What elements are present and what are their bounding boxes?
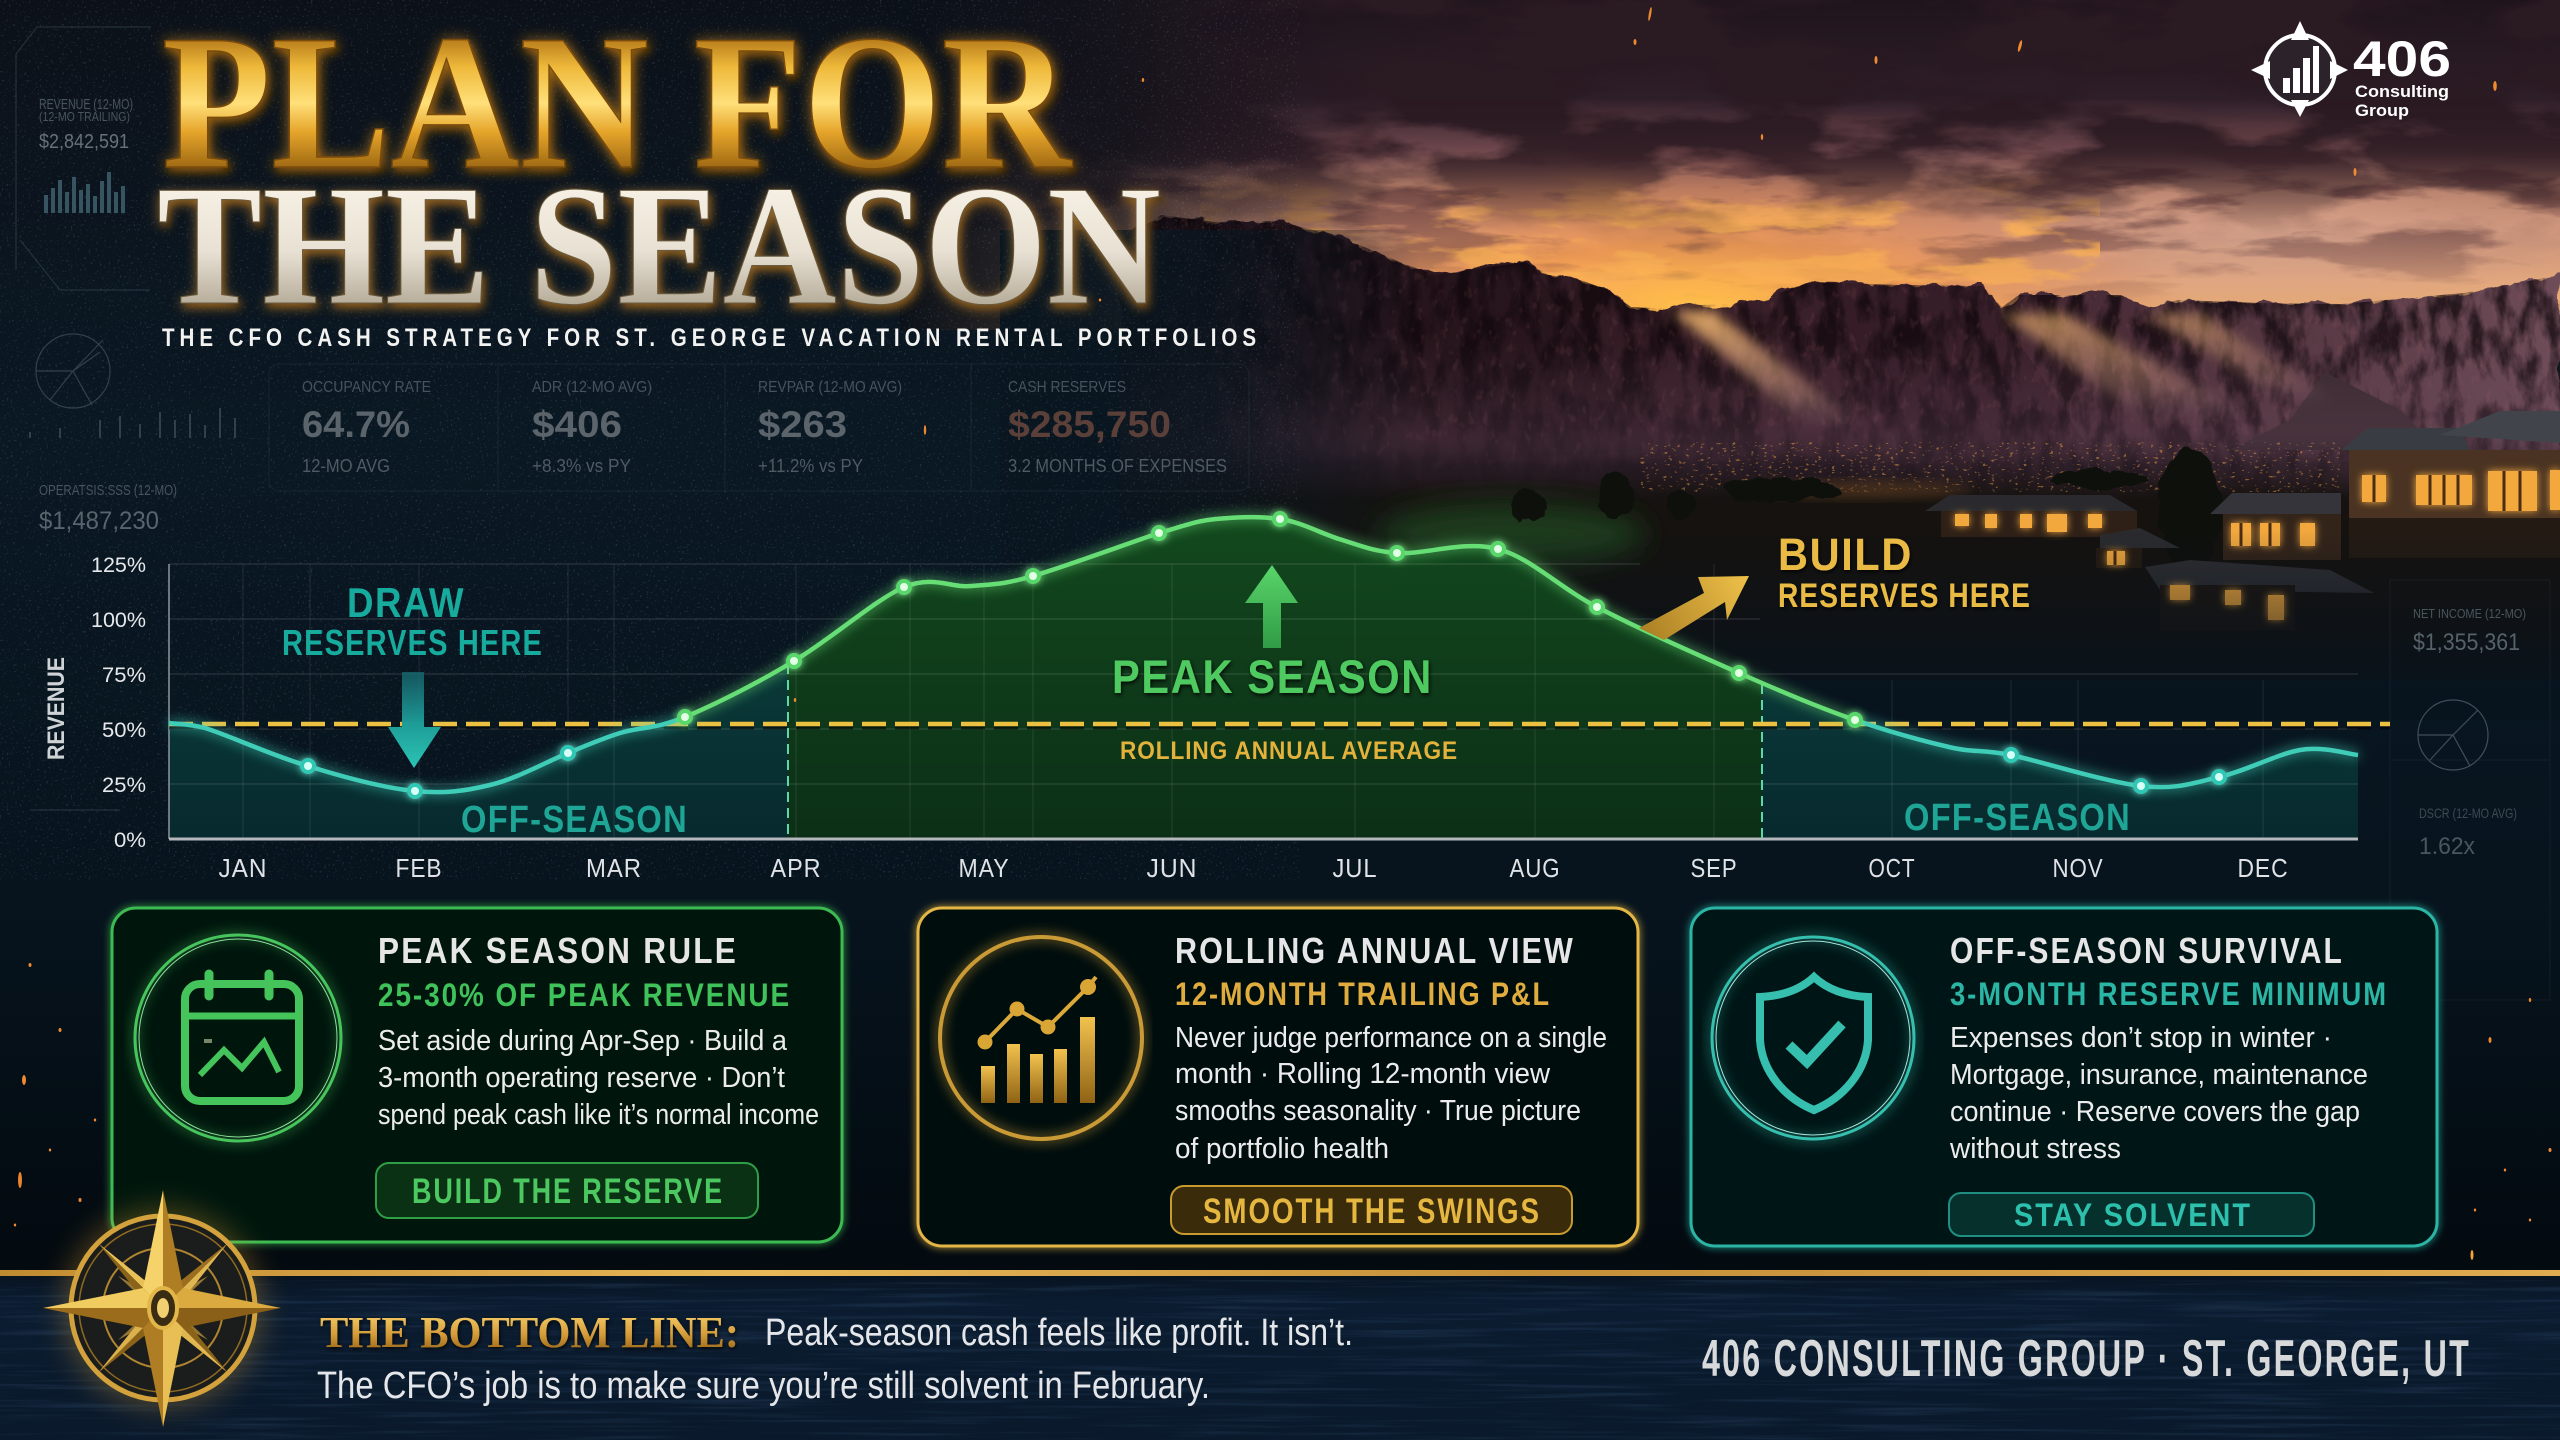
month labels: AUG xyxy=(1510,853,1560,883)
draw reserves callout xyxy=(282,579,543,663)
KPI occupancy xyxy=(302,379,431,476)
icon: calendar with chart xyxy=(135,935,341,1141)
icon: shield with check xyxy=(1712,937,1914,1139)
y axis labels: 0% xyxy=(114,829,146,852)
y axis labels: 25% xyxy=(102,774,146,797)
logo wordmark: Consulting xyxy=(2355,82,2449,101)
card body: Mortgage, insurance, maintenance xyxy=(1950,1059,2368,1091)
ghost net income: $1,355,361 xyxy=(2413,629,2520,656)
card body: 3-month operating reserve · Don’t xyxy=(378,1062,785,1094)
logo xyxy=(2251,21,2451,120)
month labels: FEB xyxy=(396,853,442,883)
fades into dark dashboard xyxy=(1000,230,2560,750)
off-season fill left xyxy=(170,668,788,838)
logo wordmark: Group xyxy=(2355,101,2409,120)
arrow: draw down xyxy=(388,672,441,768)
KPI cash reserves: CASH RESERVES xyxy=(1008,379,1126,396)
card: off-season survival xyxy=(1691,908,2437,1246)
ghost net income xyxy=(2413,606,2526,656)
y axis labels: 100% xyxy=(91,609,146,632)
month labels: JUL xyxy=(1332,853,1378,883)
KPI RevPAR: $263 xyxy=(758,404,847,445)
card body: of portfolio health xyxy=(1175,1133,1389,1165)
revenue curve, off-season start xyxy=(169,717,685,792)
card: rolling annual view xyxy=(918,908,1638,1246)
icon: bars with trend line xyxy=(940,937,1142,1139)
ghost revenue metric: (12-MO TRAILING) xyxy=(39,109,130,124)
card subheading: 3-MONTH RESERVE MINIMUM xyxy=(1950,976,2388,1012)
revenue curve, peak xyxy=(685,517,1855,720)
trees xyxy=(1512,450,2222,570)
faint dashboard grain xyxy=(0,0,1300,880)
card: peak season rule xyxy=(112,908,842,1242)
KPI cash reserves: $285,750 xyxy=(1008,404,1171,445)
KPI cash reserves xyxy=(1008,379,1227,476)
card subheading: 25-30% OF PEAK REVENUE xyxy=(378,977,791,1013)
card heading: OFF-SEASON SURVIVAL xyxy=(1950,930,2344,971)
KPI occupancy: OCCUPANCY RATE xyxy=(302,379,431,396)
card body xyxy=(1175,1022,1607,1165)
month labels: APR xyxy=(770,853,822,883)
card body xyxy=(1949,1022,2368,1165)
ghost DSCR: 1.62x xyxy=(2419,833,2475,860)
KPI cash reserves: 3.2 MONTHS OF EXPENSES xyxy=(1008,456,1227,476)
green data points xyxy=(677,511,1863,728)
bottom line statement: THE BOTTOM LINE: xyxy=(320,1308,739,1357)
card body: spend peak cash like it’s normal income xyxy=(378,1099,819,1131)
card body: without stress xyxy=(1949,1133,2121,1165)
ghost dashboard: right column xyxy=(2390,580,2550,1000)
ghost revenue metric xyxy=(39,96,133,153)
card body: Never judge performance on a single xyxy=(1175,1022,1607,1054)
draw reserves callout: DRAW xyxy=(347,579,465,626)
background scene: sunset sky over mountains xyxy=(930,0,2560,658)
card body: Expenses don’t stop in winter · xyxy=(1950,1022,2332,1054)
revenue curve, off-season end xyxy=(1855,720,2358,787)
x axis xyxy=(169,838,2358,840)
build reserves callout xyxy=(1778,529,2031,615)
ghost sparkline bars xyxy=(30,408,235,438)
title xyxy=(157,0,1161,341)
button: smooth the swings xyxy=(1171,1186,1572,1234)
ghost KPI strip xyxy=(269,364,1249,491)
month labels xyxy=(218,853,2288,883)
y axis labels xyxy=(91,554,146,852)
subtitle: THE CFO CASH STRATEGY FOR ST. GEORGE VACATION RENTAL PORTFOLIOS xyxy=(162,324,1261,352)
KPI RevPAR: REVPAR (12-MO AVG) xyxy=(758,379,902,396)
KPI ADR: ADR (12-MO AVG) xyxy=(532,379,652,396)
teal data points xyxy=(300,745,2227,799)
logo wordmark: 406 xyxy=(2353,31,2451,87)
button: build the reserve: BUILD THE RESERVE xyxy=(412,1172,724,1211)
ghost dashboard: left column xyxy=(16,27,235,810)
card heading: PEAK SEASON RULE xyxy=(378,930,738,971)
rolling annual average label: ROLLING ANNUAL AVERAGE xyxy=(1120,737,1458,765)
off-season fill right xyxy=(1762,686,2358,838)
bottom line statement xyxy=(317,1308,1353,1407)
logo wordmark xyxy=(2353,31,2451,120)
ghost operating metric xyxy=(39,482,177,535)
draw reserves callout: RESERVES HERE xyxy=(282,622,543,663)
card body: month · Rolling 12-month view xyxy=(1175,1058,1551,1090)
card body: Set aside during Apr-Sep · Build a xyxy=(378,1025,788,1057)
ghost DSCR: DSCR (12-MO AVG) xyxy=(2419,805,2517,821)
mountain range xyxy=(1120,210,2560,520)
button: build the reserve xyxy=(376,1163,758,1218)
bottom line statement: The CFO’s job is to make sure you’re still solvent in February. xyxy=(317,1365,1210,1407)
build reserves callout: RESERVES HERE xyxy=(1778,577,2031,615)
title line one: PLAN FOR xyxy=(162,0,1073,209)
card body: continue · Reserve covers the gap xyxy=(1950,1096,2360,1128)
button: smooth the swings: SMOOTH THE SWINGS xyxy=(1203,1192,1541,1231)
bottom cards xyxy=(112,908,2437,1246)
logo compass mark xyxy=(2251,21,2348,117)
ghost revenue metric: REVENUE (12-MO) xyxy=(39,96,133,113)
ghost pie xyxy=(2418,700,2488,770)
KPI occupancy: 12-MO AVG xyxy=(302,456,390,476)
ghost revenue metric: $2,842,591 xyxy=(39,131,129,153)
month labels: MAY xyxy=(958,853,1010,883)
KPI RevPAR xyxy=(758,379,902,476)
KPI ADR: $406 xyxy=(532,404,622,445)
ghost operating metric: $1,487,230 xyxy=(39,507,159,535)
KPI RevPAR: +11.2% vs PY xyxy=(758,456,863,476)
resort houses xyxy=(1925,411,2560,630)
arrow: peak up xyxy=(1245,565,1298,648)
ghost net income: NET INCOME (12-MO) xyxy=(2413,606,2526,621)
month labels: MAR xyxy=(586,853,642,883)
y axis labels: 50% xyxy=(102,719,146,742)
valley and lights xyxy=(1280,442,2560,680)
KPI ADR xyxy=(532,379,652,476)
card body xyxy=(378,1025,819,1131)
off-season label left: OFF-SEASON xyxy=(461,799,688,841)
button: stay solvent: STAY SOLVENT xyxy=(2014,1197,2252,1233)
KPI ADR: +8.3% vs PY xyxy=(532,456,631,476)
light rays xyxy=(1672,311,2341,430)
seasonal revenue chart xyxy=(43,511,2390,883)
build reserves callout: BUILD xyxy=(1778,529,1913,580)
peak season label: PEAK SEASON xyxy=(1112,650,1433,703)
y axis labels: 125% xyxy=(91,554,146,577)
icon: gold compass xyxy=(43,1190,281,1427)
month labels: DEC xyxy=(2238,853,2288,883)
ghost mini bar chart xyxy=(44,172,125,213)
bottom line statement: Peak-season cash feels like profit. It isn’t. xyxy=(765,1312,1353,1354)
y axis title: REVENUE xyxy=(43,657,70,760)
month labels: JUN xyxy=(1146,853,1198,883)
ghost frames xyxy=(16,27,151,810)
peak season fill xyxy=(788,519,1762,838)
ghost DSCR xyxy=(2419,805,2517,860)
ghost pie chart xyxy=(36,334,110,408)
sky gradient xyxy=(900,0,2560,330)
month labels: NOV xyxy=(2052,853,2104,883)
title line two: THE SEASON xyxy=(157,151,1161,341)
month labels: SEP xyxy=(1690,853,1738,883)
card body: smooths seasonality · True picture xyxy=(1175,1095,1581,1127)
footer band xyxy=(0,1270,2560,1440)
month labels: JAN xyxy=(218,853,268,883)
button: stay solvent xyxy=(1949,1193,2314,1236)
KPI occupancy: 64.7% xyxy=(302,404,410,445)
card subheading: 12-MONTH TRAILING P&L xyxy=(1175,976,1551,1012)
month labels: OCT xyxy=(1868,853,1916,883)
season boundaries xyxy=(788,664,1762,839)
y axis labels: 75% xyxy=(102,664,146,687)
arrow: build up xyxy=(1639,576,1749,640)
rolling annual average line xyxy=(169,724,2390,727)
card heading: ROLLING ANNUAL VIEW xyxy=(1175,930,1575,971)
y axis xyxy=(168,564,170,839)
off-season label right: OFF-SEASON xyxy=(1904,797,2131,839)
ghost operating metric: OPERATSIS:SSS (12-MO) xyxy=(39,482,177,499)
